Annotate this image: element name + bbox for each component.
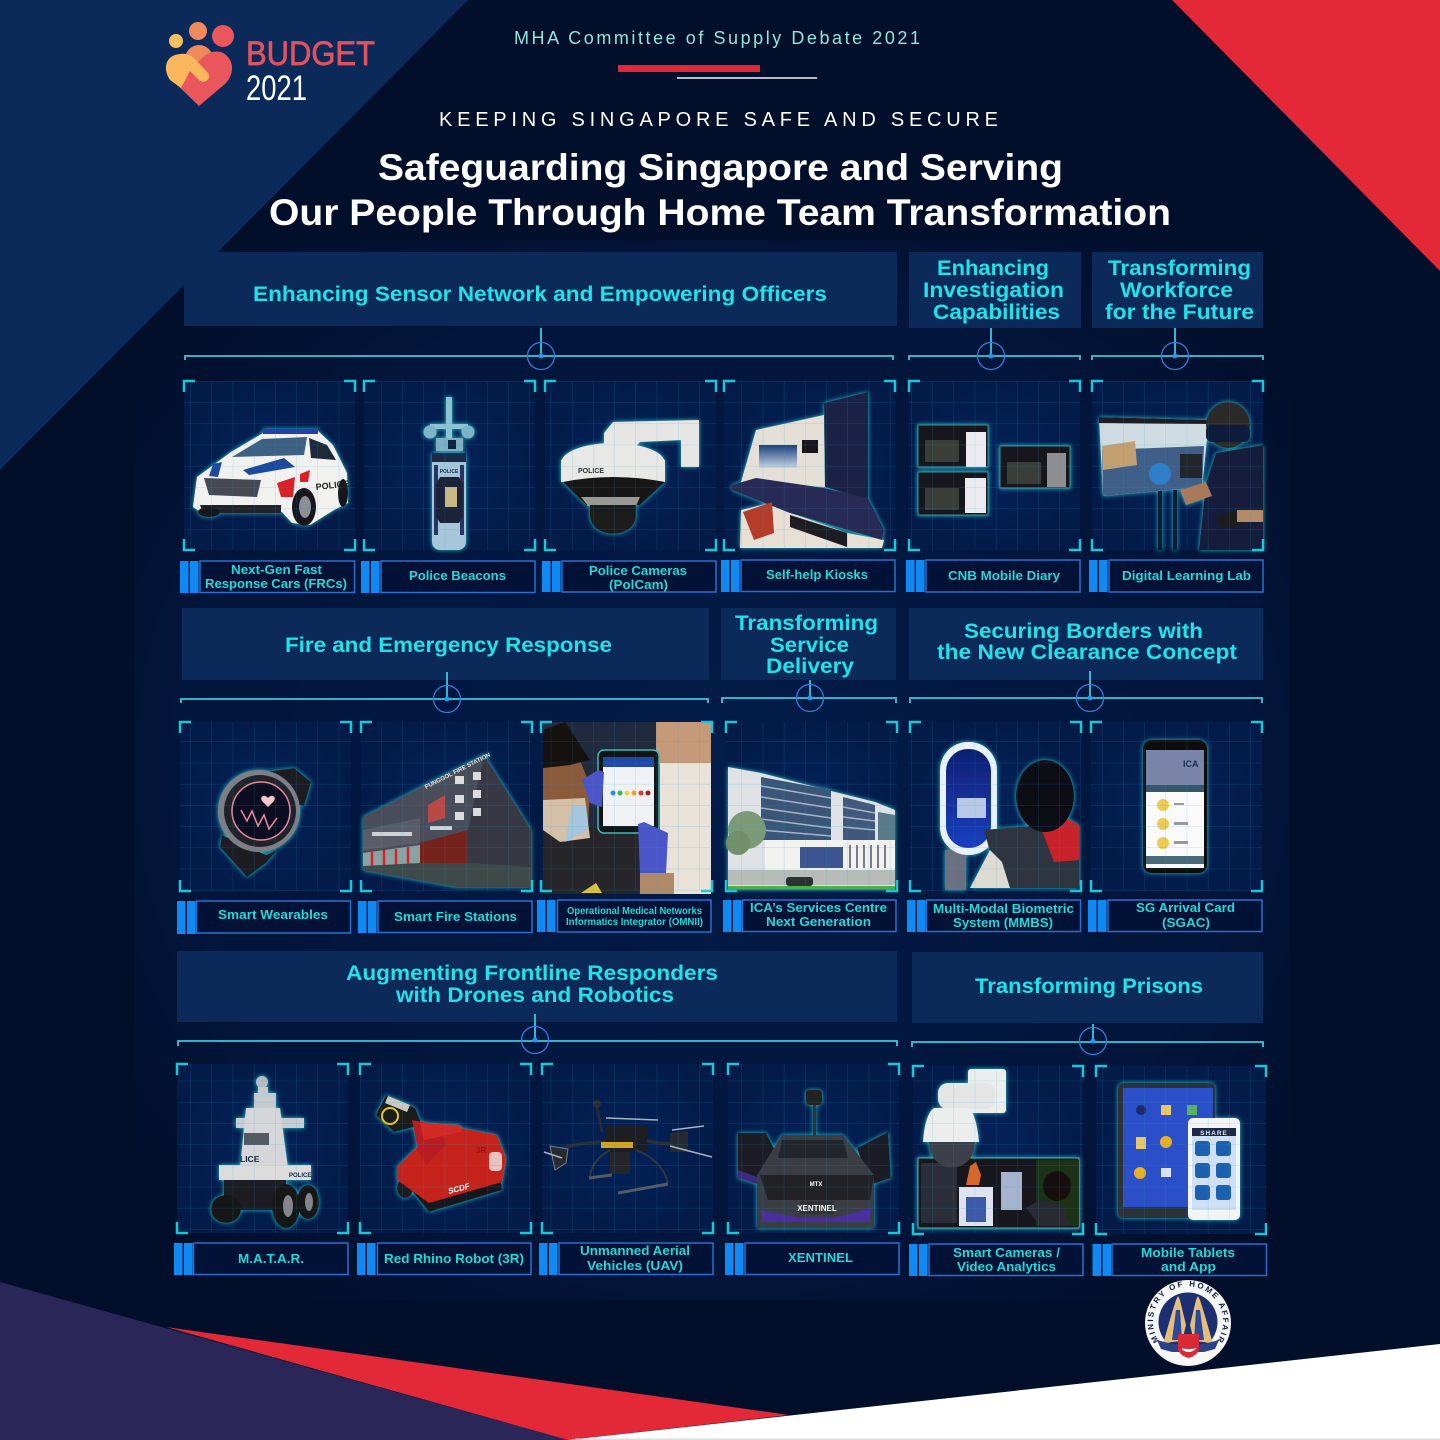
heading: Augmenting Frontline Responders: Augmenting Frontline Responders — [346, 962, 718, 985]
logo: Budget 2021: 2021 — [246, 69, 307, 108]
caption: CNB Mobile Diary — [906, 560, 1080, 592]
image: SG Arrival Card phone: ICA — [1183, 759, 1199, 769]
caption: Smart Cameras — [909, 1244, 1083, 1276]
caption: ICA Services Centre: ICA’s Services Centre — [750, 900, 887, 915]
heading: Securing Borders — [909, 608, 1263, 680]
caption: OMNII: Operational Medical Networks — [567, 906, 702, 917]
heading: Securing Borders: Securing Borders with — [964, 620, 1203, 643]
panel: Next-Gen Fast Response Cars — [184, 381, 355, 550]
image: firefighting robot: SCDF — [447, 1181, 472, 1196]
heading: Transforming Service Delivery: Transforming — [735, 612, 878, 635]
heading: Transforming Prisons — [912, 952, 1263, 1023]
caption: Smart Fire Stations: Smart Fire Stations — [394, 909, 517, 924]
image: app screens — [918, 425, 1070, 515]
image: police car — [193, 429, 350, 526]
heading: Transforming Workforce: for the Future — [1105, 301, 1254, 324]
heading: Transforming Prisons: Transforming Prisons — [975, 975, 1203, 998]
heading: Securing Borders: the New Clearance Concept — [937, 641, 1237, 664]
kicker: KEEPING SINGAPORE SAFE AND SECURE — [439, 109, 998, 131]
caption: UAV: Vehicles (UAV) — [587, 1258, 683, 1273]
panel: Police Beacons — [364, 381, 535, 550]
caption: MMBS: System (MMBS) — [953, 915, 1053, 930]
corner brackets — [913, 1066, 1083, 1234]
image: police car: POLICE — [315, 479, 350, 492]
heading: Transforming Service Delivery — [721, 608, 896, 680]
image: drone — [544, 1100, 712, 1193]
caption: Police Cameras: Police Cameras — [589, 563, 687, 578]
panel: ICA Services Centre — [726, 722, 897, 891]
corner brackets — [910, 722, 1081, 891]
panel: Self-help Kiosks — [724, 381, 895, 550]
image: VR officer and screen — [1099, 402, 1263, 550]
panel: Smart Wearables — [180, 722, 351, 891]
image: police beacon — [424, 397, 474, 550]
caption: Digital Learning Lab: Digital Learning Lab — [1122, 568, 1251, 583]
caption: Police Cameras: (PolCam) — [609, 577, 668, 592]
heading: Enhancing Investigation: Enhancing — [937, 257, 1049, 280]
caption: SG Arrival Card: (SGAC) — [1162, 915, 1210, 930]
image: tablet and phone: SHARE — [1200, 1130, 1228, 1137]
corner brackets — [1096, 1066, 1266, 1234]
image: XENTINEL vehicle: XENTINEL — [797, 1204, 837, 1213]
caption: Police Cameras — [542, 561, 716, 592]
caption: MMBS: Multi-Modal Biometric — [933, 901, 1074, 916]
caption: Smart Wearables — [177, 901, 350, 934]
title: Our People Through Home Team Transformation — [269, 192, 1171, 233]
accent bars — [618, 65, 817, 79]
heading: Transforming Workforce — [1092, 252, 1263, 328]
caption: Red Rhino Robot: Red Rhino Robot (3R) — [384, 1251, 524, 1266]
title — [269, 147, 1171, 233]
caption: Smart Fire Stations — [358, 901, 532, 933]
image: dome camera: POLICE — [578, 468, 604, 475]
logo: Budget 2021 — [166, 22, 375, 108]
image: fire station — [363, 752, 531, 887]
corner brackets — [1091, 722, 1262, 891]
panel: M.A.T.A.R. — [177, 1064, 348, 1233]
panel: SG Arrival Card — [1091, 722, 1262, 891]
corner brackets — [545, 381, 716, 550]
caption: Next-Gen Fast Response Cars — [180, 561, 354, 593]
heading: Fire and Emergency Response: Fire and Emergency Response — [285, 634, 612, 657]
caption: Smart Cameras: Video Analytics — [957, 1259, 1056, 1274]
heading: Enhancing Investigation — [909, 252, 1081, 328]
caption: ICA Services Centre: Next Generation — [766, 914, 871, 929]
image: dome camera — [561, 420, 699, 534]
image: SG Arrival Card phone — [1143, 740, 1207, 873]
caption: Next-Gen Fast Response Cars: Response Cars (FRCs) — [205, 576, 347, 591]
caption: Self-help Kiosks: Self-help Kiosks — [766, 567, 868, 582]
title: Safeguarding Singapore and Serving — [378, 147, 1063, 188]
caption: SG Arrival Card: SG Arrival Card — [1136, 900, 1235, 915]
corner brackets — [184, 381, 355, 550]
connector row 3 — [178, 1014, 1263, 1054]
panel: Police Cameras — [545, 381, 716, 550]
caption: Mobile Tablets — [1092, 1244, 1266, 1276]
heading: Transforming Service Delivery: Service — [770, 634, 849, 657]
heading: Enhancing Sensor Network — [184, 252, 897, 326]
heading: Transforming Workforce: Workforce — [1120, 279, 1233, 302]
corner brackets — [909, 381, 1080, 550]
panel: Red Rhino Robot — [360, 1064, 531, 1233]
caption: ICA Services Centre — [723, 900, 896, 932]
panel: XENTINEL — [728, 1064, 899, 1233]
corner brackets — [724, 381, 895, 550]
heading: Fire and Emergency Response — [182, 608, 709, 680]
image: firefighting robot — [376, 1095, 506, 1212]
image: fire station: PUNGGOL FIRE STATION — [424, 752, 492, 791]
caption: Police Beacons — [361, 561, 535, 593]
heading: Augmenting Frontline Responders: with Drones and Robotics — [395, 984, 674, 1007]
caption: Mobile Tablets: and App — [1161, 1259, 1216, 1274]
connector row 2 — [181, 671, 1262, 712]
image: kiosk — [732, 392, 884, 548]
caption: Smart Cameras: Smart Cameras / — [953, 1245, 1060, 1260]
caption: XENTINEL — [725, 1243, 899, 1275]
corner brackets — [177, 1064, 348, 1233]
heading: Enhancing Sensor Network: Enhancing Sensor Network and Empowering Officers — [253, 283, 827, 306]
image: patrol robot: LICE — [240, 1154, 260, 1164]
panel: OMNII — [541, 722, 712, 894]
caption: M.A.T.A.R. — [174, 1243, 348, 1275]
caption: M.A.T.A.R.: M.A.T.A.R. — [238, 1251, 304, 1266]
caption: OMNII — [537, 900, 711, 932]
heading: Transforming Workforce: Transforming — [1108, 257, 1251, 280]
caption: Digital Learning Lab — [1089, 560, 1263, 592]
image: patrol robot — [211, 1076, 319, 1228]
panel: MMBS — [910, 722, 1081, 891]
image: firefighting robot: 3R — [476, 1146, 486, 1155]
panel: Smart Cameras — [913, 1066, 1083, 1234]
corner brackets — [360, 1064, 531, 1233]
corner brackets — [1092, 381, 1263, 550]
corner brackets — [361, 722, 532, 891]
caption: Mobile Tablets: Mobile Tablets — [1141, 1245, 1235, 1260]
event subtitle: MHA Committee of Supply Debate 2021 — [514, 28, 920, 48]
corner brackets — [542, 1064, 713, 1233]
image: biometric kiosk and traveller — [940, 742, 1079, 890]
corner brackets — [364, 381, 535, 550]
image: police beacon: POLICE — [440, 469, 459, 475]
seal: Ministry of Home Affairs: MINISTRY OF HOME AFFAIRS — [1148, 1280, 1229, 1344]
caption: OMNII: Informatics Integrator (OMNII) — [566, 917, 703, 928]
heading: Enhancing Investigation: Capabilities — [933, 301, 1060, 324]
image: PTZ camera and video analytics — [918, 1069, 1079, 1228]
heading: Transforming Service Delivery: Delivery — [766, 655, 854, 678]
caption: XENTINEL: XENTINEL — [788, 1250, 853, 1265]
image: tablet and phone — [1118, 1083, 1240, 1220]
panel: Mobile Tablets — [1096, 1066, 1266, 1234]
caption: Smart Wearables: Smart Wearables — [218, 907, 328, 922]
panel: CNB Mobile Diary — [909, 381, 1080, 550]
caption: MMBS — [907, 900, 1080, 932]
image: ICA building — [726, 767, 895, 890]
panel: Digital Learning Lab — [1092, 381, 1263, 550]
caption: UAV — [539, 1243, 713, 1275]
image: XENTINEL vehicle: MTX — [810, 1182, 822, 1188]
caption: Red Rhino Robot — [357, 1243, 531, 1275]
panel: Smart Fire Stations — [361, 722, 532, 891]
caption: Next-Gen Fast Response Cars: Next-Gen Fast — [231, 562, 323, 577]
corner brackets — [180, 722, 351, 891]
corner brackets — [541, 722, 712, 891]
image: medic with tablet — [543, 722, 711, 894]
connector row 1 — [185, 328, 1263, 370]
caption: UAV: Unmanned Aerial — [580, 1243, 690, 1258]
panel: UAV — [542, 1064, 713, 1233]
corner brackets — [728, 1064, 899, 1233]
heading: Enhancing Investigation: Investigation — [923, 279, 1064, 302]
heading: Augmenting Frontline Responders — [177, 951, 897, 1022]
caption: Police Beacons: Police Beacons — [409, 568, 506, 583]
caption: Self-help Kiosks — [721, 560, 895, 592]
image: patrol robot: POLICE — [289, 1173, 311, 1179]
image: XENTINEL vehicle — [738, 1090, 891, 1228]
caption: CNB Mobile Diary: CNB Mobile Diary — [948, 568, 1061, 583]
logo: Budget 2021: BUDGET — [246, 35, 375, 73]
corner brackets — [726, 722, 897, 891]
caption: SG Arrival Card — [1088, 900, 1262, 932]
image: smart watch — [218, 768, 311, 877]
